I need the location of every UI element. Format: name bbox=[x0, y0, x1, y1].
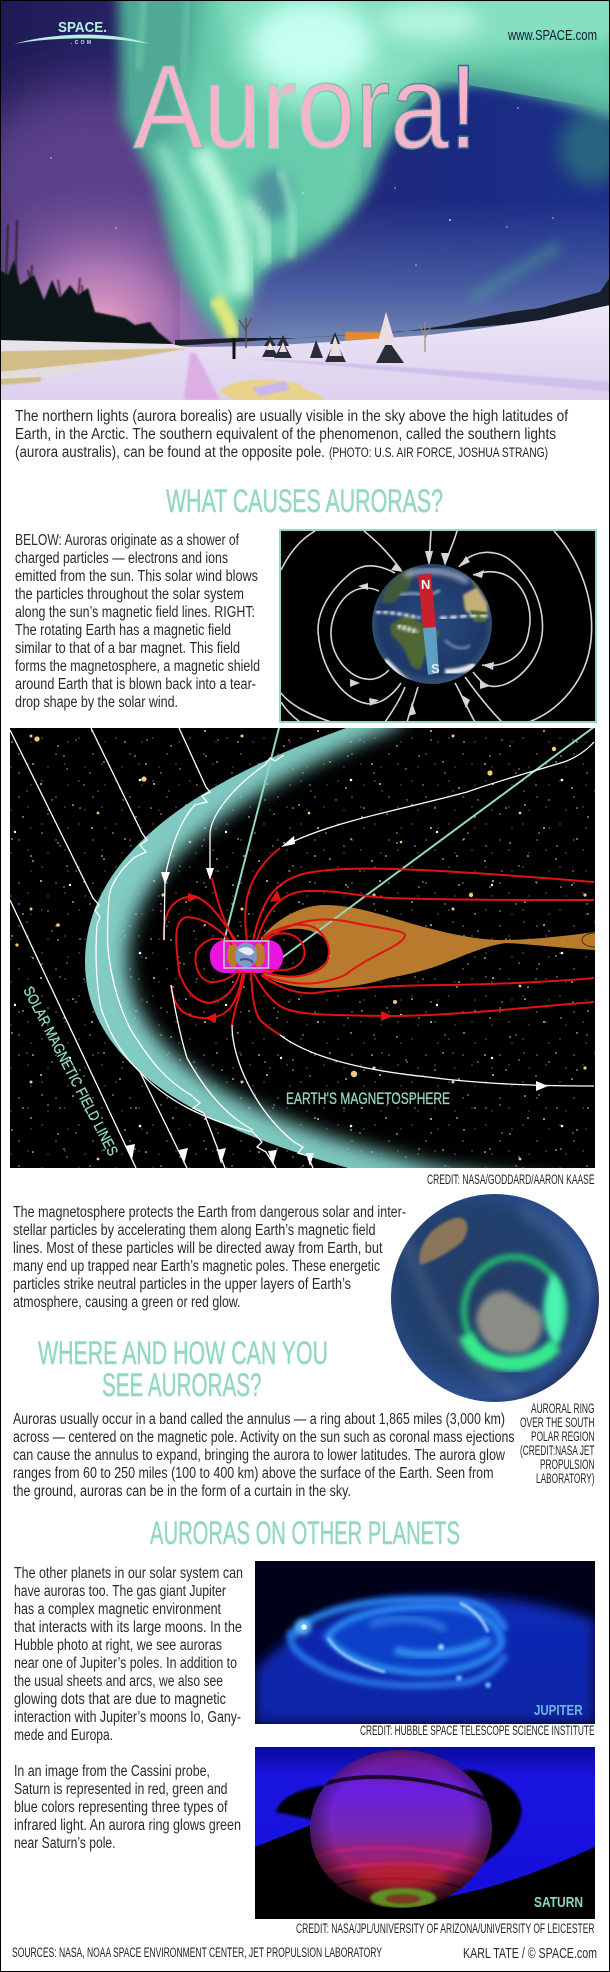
image: auroral ring over south polar region bbox=[391, 1194, 599, 1402]
text block: Saturn: near Saturn’s pole. bbox=[14, 1835, 116, 1852]
arrowheads bbox=[350, 551, 494, 716]
small snowy trees bbox=[262, 332, 404, 363]
white field lines bbox=[10, 728, 594, 1168]
hero photo: aurora over snowy landscape bbox=[1, 1, 609, 400]
text block: causes: forms the magnetosphere, a magnetic shield bbox=[15, 658, 260, 675]
text block: magnetosphere protection: lines. Most of these particles will be directed away from Earth, but bbox=[13, 1240, 383, 1257]
text block: Jupiter: Hubble photo at right, we see auroras bbox=[14, 1637, 222, 1654]
text block: Jupiter: The other planets in our solar system can bbox=[14, 1565, 243, 1582]
orange lights on horizon bbox=[345, 332, 387, 340]
text block: causes: The rotating Earth has a magnetic field bbox=[15, 622, 231, 639]
text block: Saturn bbox=[14, 1763, 241, 1852]
text block: Saturn: infrared light. An aurora ring glows green bbox=[14, 1817, 241, 1834]
label: earth's magnetosphere: EARTH’S MAGNETOSPHERE bbox=[286, 1090, 450, 1108]
text block: causes: BELOW: Auroras originate as a shower of bbox=[15, 532, 240, 549]
text block: Jupiter: has a complex magnetic environment bbox=[14, 1601, 222, 1618]
heading: where and how bbox=[38, 1335, 328, 1403]
panel: bar magnet diagram bbox=[280, 530, 596, 722]
heading: where and how: WHERE AND HOW CAN YOU bbox=[38, 1335, 328, 1371]
text block: Jupiter: have auroras too. The gas giant Jupiter bbox=[14, 1583, 226, 1600]
magnet: S bbox=[431, 661, 440, 676]
text block: where and how: the ground, auroras can be in the form of a curtain in the sky. bbox=[13, 1483, 351, 1500]
red field lines bbox=[164, 848, 594, 1035]
logo: SPACE.com: SPACE. bbox=[58, 19, 107, 36]
text block: causes: charged particles — electrons and ions bbox=[15, 550, 228, 567]
text block: Saturn: Saturn is represented in red, green and bbox=[14, 1781, 228, 1798]
text block: magnetosphere protection: The magnetosphere protects the Earth from dangerous solar and inter- bbox=[13, 1204, 406, 1221]
text block: Jupiter: near one of Jupiter’s poles. In addition to bbox=[14, 1655, 237, 1672]
radiation belts bbox=[210, 940, 283, 973]
text block: magnetosphere protection: many end up trapped near Earth’s magnetic poles. These energetic bbox=[13, 1258, 380, 1275]
text block: magnetosphere protection bbox=[13, 1204, 406, 1311]
magnet bbox=[418, 574, 440, 676]
text block: magnetosphere protection: stellar particles by accelerating them along Earth’s magnetic field bbox=[13, 1222, 376, 1239]
text block: causes: drop shape by the solar wind. bbox=[15, 694, 178, 711]
text block: where and how: ranges from 60 to 250 miles (100 to 400 km) above the surface of the Earth. Seen from bbox=[13, 1465, 494, 1482]
text block: Saturn: In an image from the Cassini probe, bbox=[14, 1763, 210, 1780]
text block: causes: emitted from the sun. This solar wind blows bbox=[15, 568, 258, 585]
connector lines from diagram to globe box bbox=[224, 727, 594, 968]
text block: causes: similar to that of a bar magnet. This field bbox=[15, 640, 240, 657]
title: Aurora! bbox=[133, 40, 478, 174]
intro paragraph: (PHOTO: U.S. AIR FORCE, JOSHUA STRANG) bbox=[329, 445, 548, 460]
text block: Jupiter: that interacts with its large moons. In the bbox=[14, 1619, 242, 1636]
text block: causes: along the sun’s magnetic field lines. RIGHT: bbox=[15, 604, 255, 621]
text block: magnetosphere protection: particles strike neutral particles in the upper layers of Earth’s bbox=[13, 1276, 351, 1293]
bow shock band bbox=[85, 728, 559, 1168]
text block: causes bbox=[15, 532, 260, 711]
text block: Jupiter: interaction with Jupiter’s moons Io, Gany- bbox=[14, 1709, 241, 1726]
logo: SPACE.com bbox=[14, 19, 150, 46]
logo: SPACE.com: .COM bbox=[71, 40, 91, 46]
bare trees on left bbox=[4, 219, 84, 298]
text block: causes: around Earth that is blown back into a tear- bbox=[15, 676, 256, 693]
globe bbox=[372, 564, 492, 684]
magnet: N bbox=[421, 577, 430, 592]
text block: Jupiter: the usual sheets and arcs, we also see bbox=[14, 1673, 223, 1690]
panel: Earth's magnetosphere diagram bbox=[10, 727, 608, 1168]
heading: what causes auroras: WHAT CAUSES AURORAS? bbox=[166, 483, 443, 519]
distant forest on right bbox=[175, 277, 610, 346]
text block: where and how bbox=[13, 1411, 515, 1500]
plasma sheet bbox=[258, 905, 595, 988]
label: Saturn: SATURN bbox=[534, 1894, 583, 1911]
label: solar magnetic field lines: SOLAR MAGNETIC FIELD LINES bbox=[19, 984, 121, 1159]
text block: Saturn: blue colors representing three types of bbox=[14, 1799, 228, 1816]
caption: auroral ring bbox=[520, 1401, 594, 1486]
text block: Jupiter bbox=[14, 1565, 243, 1744]
intro paragraph: (aurora australis), can be found at the opposite pole. bbox=[15, 444, 325, 461]
snow field bbox=[0, 305, 610, 400]
forest on left bbox=[0, 260, 172, 345]
field lines bbox=[281, 531, 592, 722]
image: Jupiter aurora bbox=[255, 1561, 595, 1724]
label: Jupiter: JUPITER bbox=[534, 1702, 583, 1719]
text block: Jupiter: glowing dots that are due to magnetic bbox=[14, 1691, 226, 1708]
text block: where and how: can cause the annulus to expand, bringing the aurora to lower latitudes. The aurora glow bbox=[13, 1447, 506, 1464]
intro paragraph bbox=[15, 408, 569, 461]
sources: SOURCES: NASA, NOAA SPACE ENVIRONMENT CENTER, JET PROPULSION LABORATORY bbox=[12, 1945, 382, 1960]
text block: causes: the particles throughout the solar system bbox=[15, 586, 244, 603]
text block: where and how: Auroras usually occur in a band called the annulus — a ring about 1,865 miles (3,000 km) bbox=[13, 1411, 505, 1428]
text block: Jupiter: mede and Europa. bbox=[14, 1727, 113, 1744]
heading: where and how: SEE AURORAS? bbox=[102, 1367, 262, 1403]
globe box inset bbox=[224, 941, 268, 968]
text block: magnetosphere protection: atmosphere, causing a green or red glow. bbox=[13, 1294, 240, 1311]
image: Saturn aurora bbox=[255, 1747, 595, 1919]
